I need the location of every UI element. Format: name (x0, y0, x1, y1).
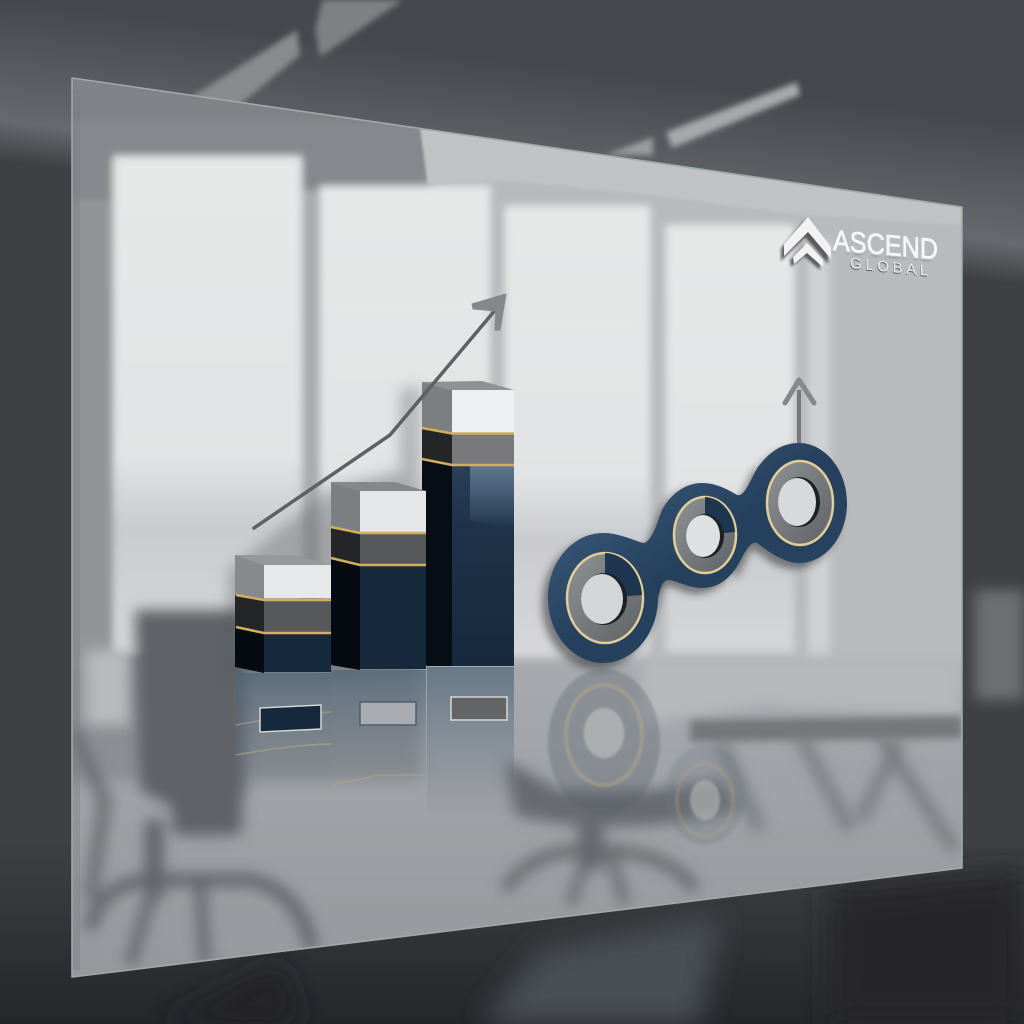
panel reflection: upper right lighter sheen (420, 128, 962, 225)
bar 1 (235, 555, 331, 673)
window wall (73, 147, 962, 666)
text: GLOBAL: GLOBAL (850, 255, 928, 280)
growth arrow (254, 294, 506, 528)
ring 1 (567, 553, 643, 643)
ring chain chart (542, 380, 847, 669)
swatch silver (360, 702, 416, 725)
bar chart shadow (228, 385, 420, 680)
swatch navy (260, 705, 321, 732)
text: ASCEND: ASCEND (832, 227, 937, 268)
ceiling lights (176, 0, 800, 155)
ring 3 (767, 461, 833, 545)
panel: glass board (60, 78, 975, 992)
up arrow (785, 380, 814, 443)
text: GLOBAL: GLOBAL (850, 256, 928, 281)
icon: chevrons (781, 217, 831, 270)
edge shadow on left of glass (73, 202, 80, 970)
chain shadow (542, 449, 841, 669)
ring reflections (548, 669, 830, 847)
text: ASCEND: ASCEND (833, 225, 938, 266)
logo: Ascend Global (781, 217, 938, 281)
bar 2 (331, 482, 426, 670)
glass board edge (72, 78, 962, 977)
bar reflections (236, 667, 514, 817)
chain body (548, 443, 847, 663)
legend swatches (260, 697, 507, 732)
ring 2 (674, 497, 736, 573)
chair reflection left (72, 610, 312, 965)
bar chart (228, 294, 514, 680)
lower room reflection (60, 650, 970, 992)
chair reflection center (505, 735, 955, 905)
bar 3 (422, 381, 514, 666)
swatch grey (451, 697, 507, 720)
